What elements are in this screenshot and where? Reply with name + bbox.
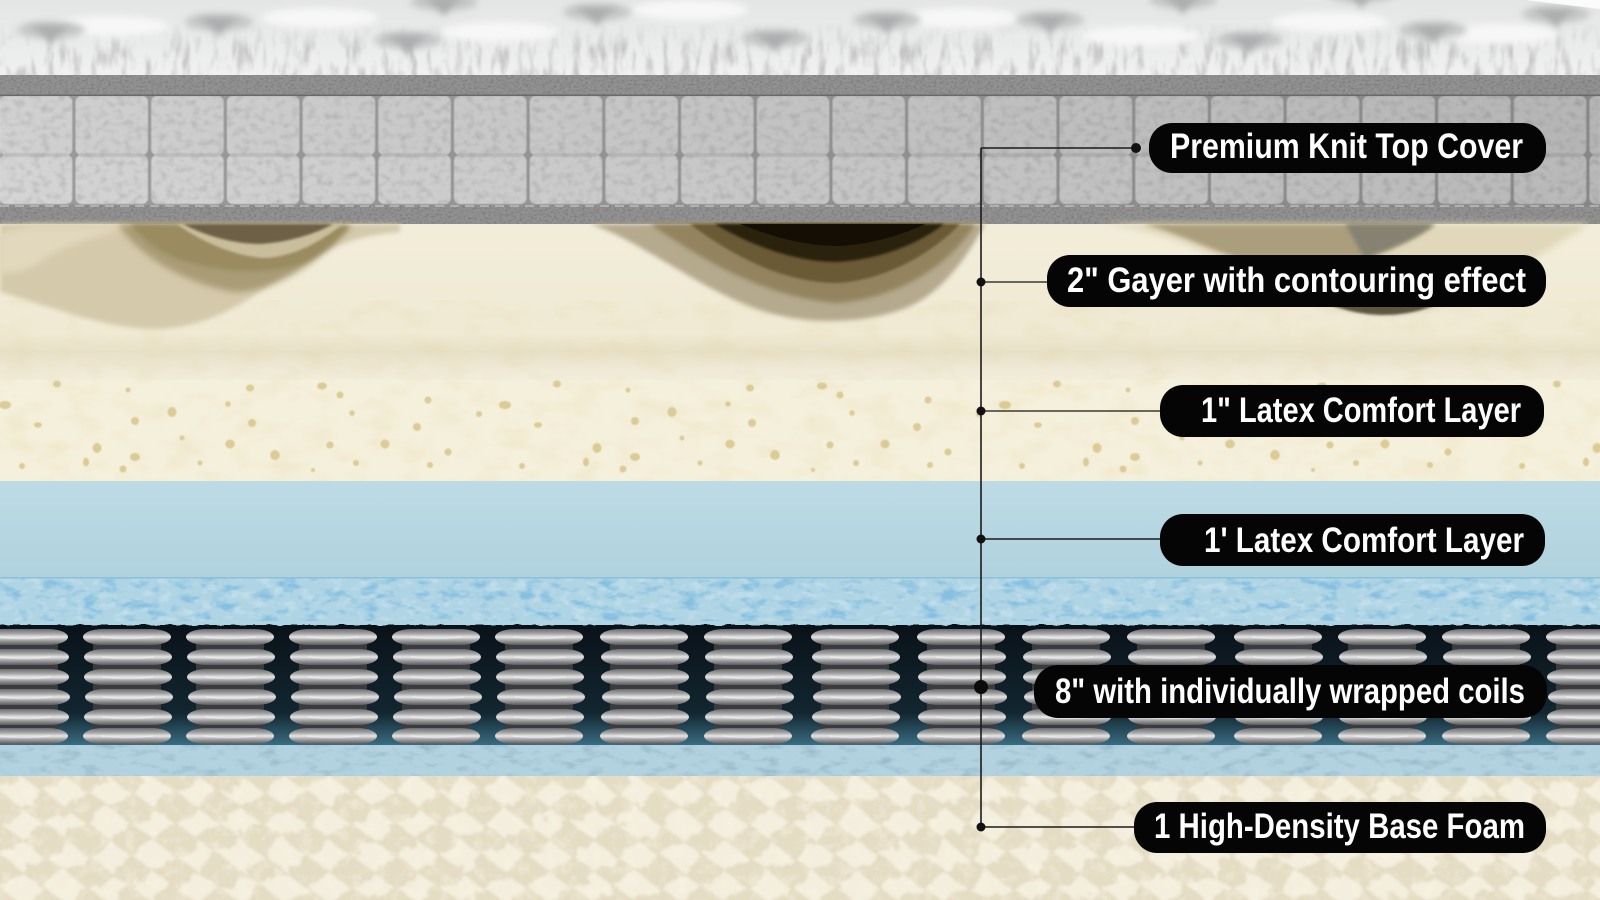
top piping band: [0, 75, 1600, 96]
callout: latex comfort layer: [976, 385, 1544, 437]
callout: wrapped coils: [974, 665, 1547, 718]
side quilted panel border: [0, 94, 1600, 208]
contour foam layer: [0, 224, 1600, 380]
callout: premium knit top cover: [981, 123, 1546, 173]
textured blue foam layer: [0, 577, 1600, 625]
lower blue foam layer: [0, 745, 1600, 776]
label: 1' Latex Comfort Layer: [1204, 521, 1524, 560]
label: Premium Knit Top Cover: [1170, 127, 1523, 166]
label: 1 High-Density Base Foam: [1154, 807, 1525, 846]
label: 2" Gayer with contouring effect: [1067, 261, 1526, 300]
smooth blue gel layer: [0, 481, 1600, 577]
latex pores: [0, 380, 1600, 472]
label: 1" Latex Comfort Layer: [1201, 391, 1521, 430]
perforated latex comfort layer: [0, 380, 1600, 481]
right foam wave shading: [1100, 224, 1590, 315]
label: 8" with individually wrapped coils: [1055, 672, 1525, 711]
leader line spine: [980, 148, 982, 827]
callout: contouring layer: [976, 255, 1546, 307]
bottom piping band: [0, 205, 1600, 224]
left foam wave shading: [0, 224, 400, 329]
quilted knit top surface: [0, 0, 1600, 76]
pocket coil spring layer: [0, 622, 1600, 748]
callout: high-density base foam: [976, 802, 1546, 853]
callout: second latex comfort layer: [976, 514, 1545, 566]
center foam wave shading: [590, 224, 985, 321]
high-density base foam: [0, 766, 1600, 900]
